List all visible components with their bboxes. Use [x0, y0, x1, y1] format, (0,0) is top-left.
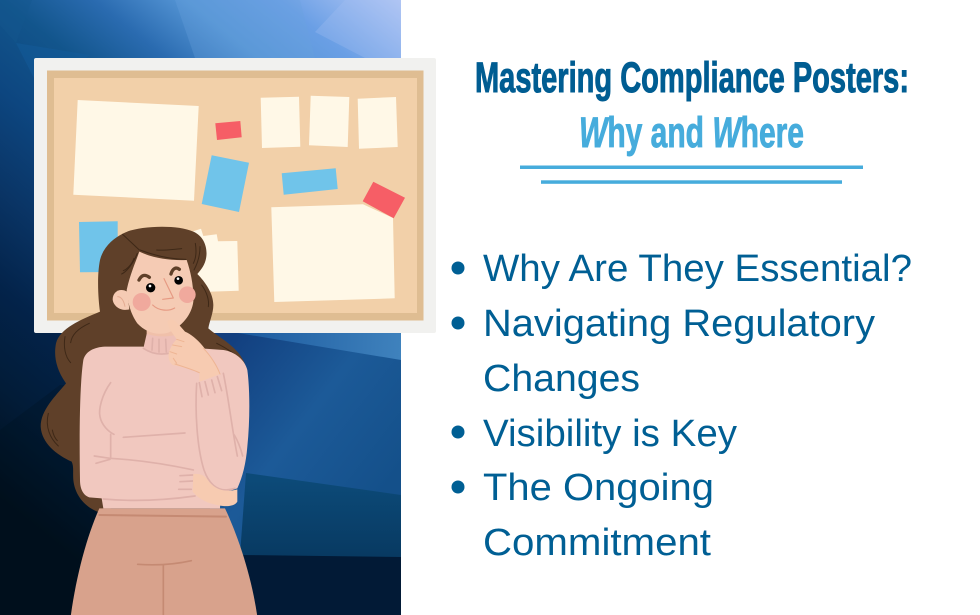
ear — [113, 290, 129, 310]
illustration: thinking woman — [41, 227, 257, 615]
small card 2 — [309, 96, 349, 147]
large note — [73, 100, 199, 201]
raised hand — [167, 319, 220, 382]
eyes — [146, 276, 183, 292]
title underline 2 — [541, 180, 842, 184]
title block — [475, 54, 909, 184]
small card 3 — [358, 97, 398, 149]
blue strip — [282, 168, 338, 195]
sweater fold lines — [94, 338, 243, 500]
red note — [363, 182, 405, 218]
bullet 4: Commitment — [483, 522, 711, 564]
bullet 2 — [452, 303, 875, 400]
bullet 1: Why Are They Essential? — [483, 248, 912, 290]
skirt — [71, 508, 257, 615]
red tag — [215, 121, 242, 140]
bullet 3: Visibility is Key — [483, 413, 737, 455]
bullet 2: Changes — [483, 358, 640, 400]
collar — [143, 333, 180, 354]
neck — [147, 327, 180, 343]
corkboard — [34, 58, 436, 333]
stacked cream notes — [192, 229, 239, 292]
bullet 2: Navigating Regulatory — [483, 303, 875, 345]
hair — [41, 227, 245, 513]
eyebrows — [139, 268, 179, 280]
finger outlines — [170, 339, 220, 374]
hair strands — [47, 234, 240, 446]
board frame — [34, 58, 436, 333]
board border — [47, 70, 424, 320]
bullet 4: The Ongoing — [483, 467, 714, 509]
panel: blue polygon background — [0, 0, 401, 615]
title underline 1 — [520, 166, 863, 169]
blue square — [79, 221, 118, 272]
cheeks — [133, 293, 151, 311]
lower hand — [193, 474, 237, 506]
small card 1 — [261, 97, 300, 148]
sweater — [80, 347, 249, 508]
nose and smile — [153, 279, 175, 310]
bullet 4 — [452, 467, 714, 564]
skirt seams — [99, 515, 226, 615]
bullet list — [452, 248, 912, 564]
face — [127, 252, 193, 334]
title line 2: Why and Where — [579, 109, 804, 157]
board cork surface — [54, 78, 417, 313]
big note — [271, 204, 395, 302]
blue note — [202, 155, 249, 212]
